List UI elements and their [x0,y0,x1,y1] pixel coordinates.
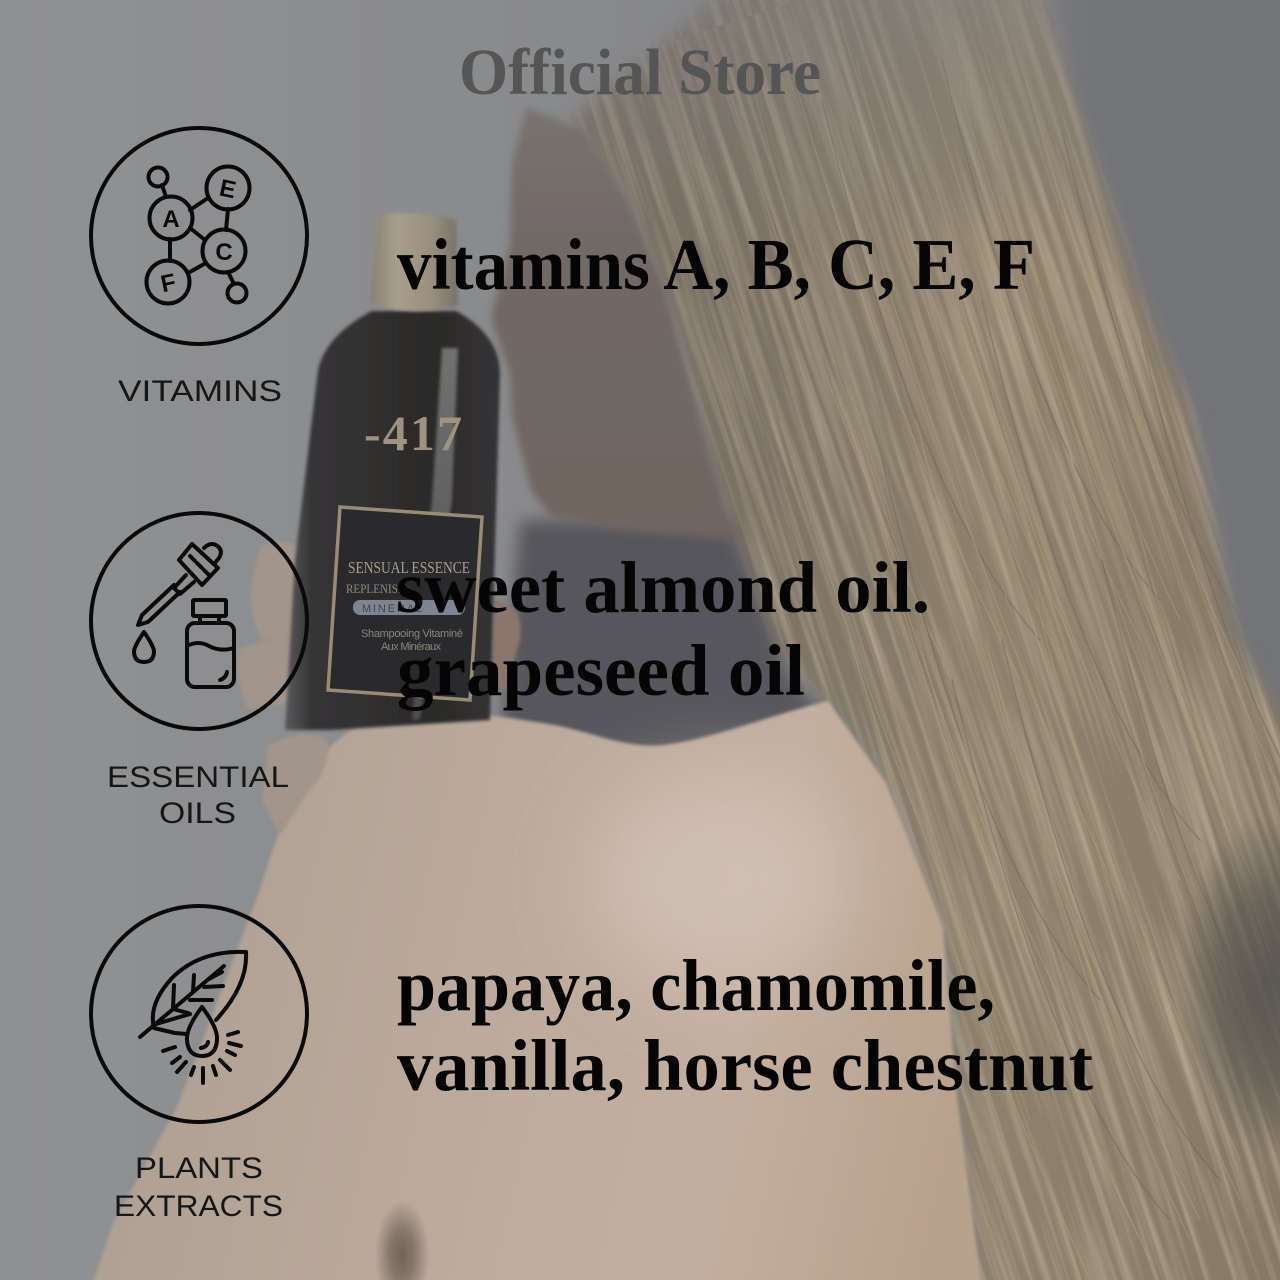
dark area behind neck [500,520,830,760]
main text: plant extracts: papaya, chamomile, [397,945,995,1026]
icon: vitamins molecule: E [217,175,238,204]
main text: oils [396,547,930,711]
product bottle [285,213,500,730]
main text: vitamins list: vitamins A, B, C, E, F [397,224,1035,305]
bottle label frame: SENSUAL ESSENCE [348,558,470,577]
icon: vitamins molecule: C [215,239,233,266]
main text: plant extracts [397,945,1093,1106]
label: essential oils: OILS [159,797,236,830]
icon: vitamins molecule: A [162,206,180,233]
bottle label frame: Shampooing Vitaminé [361,628,463,640]
head and face in profile [491,108,735,540]
bottle label frame: MINERAL [362,603,422,615]
icon: plant leaf and drop [91,906,307,1122]
dark backdrop right of hair [1066,0,1280,692]
label: plants extracts: EXTRACTS [114,1190,283,1223]
icon: essential oil dropper and bottle [91,513,307,729]
main text: oils: grapeseed oil [397,630,805,711]
bottle label frame: REPLENISH [346,581,406,596]
icon: vitamins molecule: F [158,269,178,298]
label: essential oils: ESSENTIAL [107,761,289,794]
label: plants extracts: PLANTS [135,1152,263,1185]
title: Official Store [459,36,821,109]
dark patch between hair locks at right [1170,815,1280,1155]
shoulder [92,700,982,1280]
hair [570,0,1280,1280]
bottle label frame [328,507,482,700]
bottle label frame: Aux Minéraux [381,641,442,653]
hand fingers around bottle [238,542,521,835]
main text: oils: sweet almond oil. [396,547,930,628]
main text: plant extracts: vanilla, horse chestnut [397,1025,1093,1106]
icon: vitamins molecule [91,128,307,344]
bottle brand: -417 [364,405,462,461]
label: plants extracts [114,1152,283,1223]
label: essential oils [107,761,289,830]
label: vitamins: VITAMINS [118,375,282,408]
